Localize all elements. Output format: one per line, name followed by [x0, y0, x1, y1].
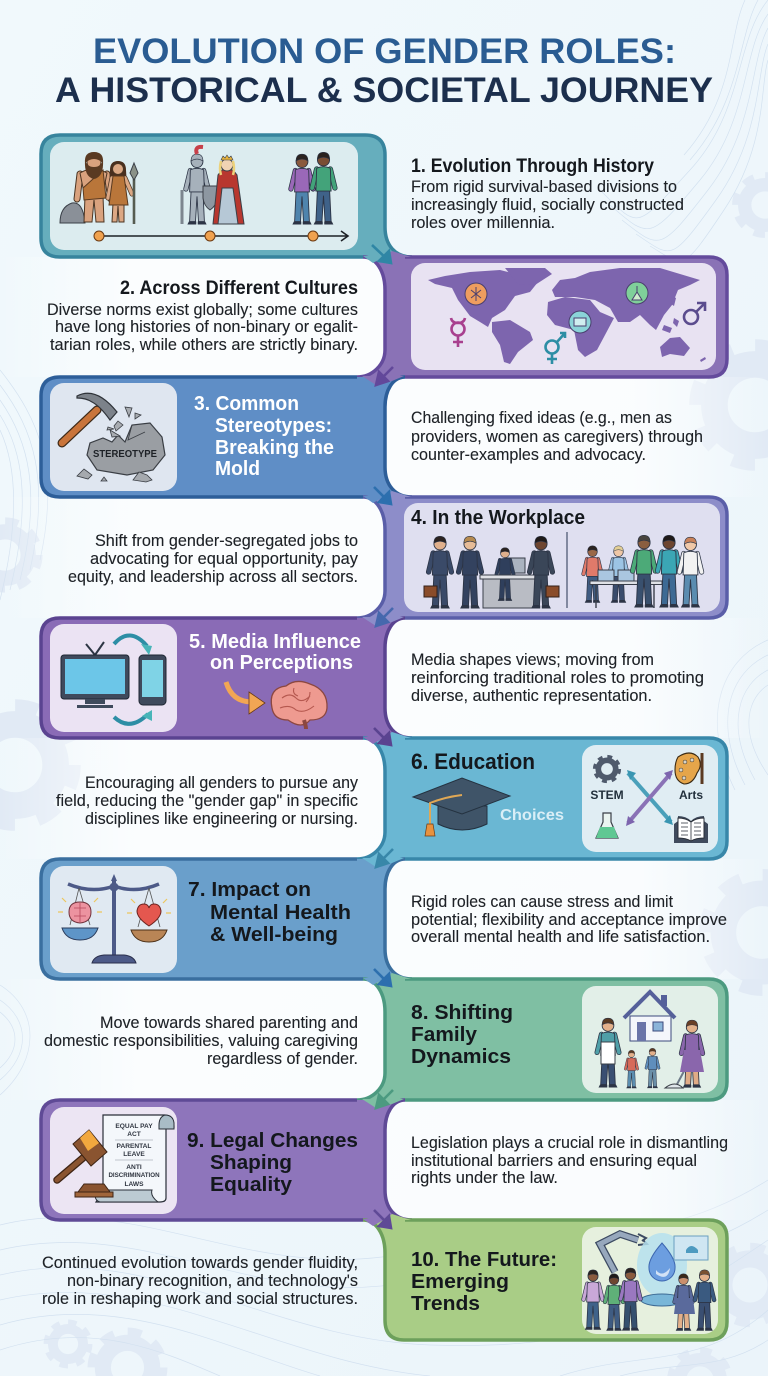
text block 5: Media shapes views; moving from — [411, 650, 654, 669]
text block 5 — [411, 650, 704, 705]
text block 7: potential; flexibility and acceptance improve — [411, 910, 727, 929]
text block 1: roles over millennia. — [411, 213, 555, 232]
text block 7 — [411, 892, 727, 946]
heading 10: Trends — [411, 1293, 480, 1315]
heading 7: & Well-being — [210, 924, 338, 946]
heading 3: Breaking the — [215, 437, 334, 459]
text block 6: field, reducing the "gender gap" in specific — [56, 791, 358, 810]
heading 4: 4. In the Workplace — [411, 507, 585, 529]
heading 3: Stereotypes: — [215, 415, 332, 437]
text block 3: counter-examples and advocacy. — [411, 445, 646, 464]
text block 6 — [56, 773, 358, 828]
heading 9: Shaping — [210, 1152, 292, 1174]
text block 10 — [42, 1253, 358, 1308]
icon: stem and arts choices: STEM — [590, 788, 624, 802]
text block 8: domestic responsibilities, valuing caregiving — [44, 1031, 358, 1050]
text block 9: rights under the law. — [411, 1168, 558, 1187]
icon: legal scroll: PARENTAL — [117, 1143, 151, 1150]
icon: legal scroll: LAWS — [124, 1181, 144, 1188]
heading 7 — [188, 879, 351, 946]
icon: legal scroll: ANTI — [126, 1164, 142, 1171]
title — [55, 32, 713, 110]
junction colour splits — [362, 251, 411, 1226]
icon: traditional office — [424, 536, 559, 608]
heading 10: 10. The Future: — [411, 1249, 557, 1271]
icon: diverse team — [584, 535, 702, 608]
text cards backdrop — [0, 257, 768, 1220]
text block 2 — [47, 278, 358, 354]
text block 8: Move towards shared parenting and — [100, 1013, 358, 1032]
label: choices: Choices — [500, 807, 564, 824]
text block 8 — [44, 1013, 358, 1068]
icon: prehistoric couple — [60, 152, 138, 224]
heading 8: 8. Shifting — [411, 1002, 513, 1024]
icon: stem and arts choices — [590, 753, 708, 843]
icon: legal scroll: ACT — [127, 1131, 141, 1138]
panel 6: education — [357, 738, 727, 859]
heading 7: 7. Impact on — [188, 879, 311, 901]
text block 5: diverse, authentic representation. — [411, 686, 652, 705]
timeline arrow — [94, 231, 348, 241]
icon: legal scroll: DISCRIMINATION — [108, 1172, 160, 1179]
icon: modern couple — [291, 152, 335, 225]
text block 6: disciplines like engineering or nursing. — [85, 809, 358, 828]
text block 4: equity, and leadership across all sectors. — [68, 567, 358, 586]
icon: robot arm, hologram and people — [584, 1233, 714, 1331]
heading 5 — [189, 631, 361, 674]
icons: gender symbols — [451, 303, 705, 364]
text block 4 — [68, 531, 358, 586]
heading 8: Family — [411, 1024, 478, 1046]
icon: legal scroll: EQUAL PAY — [115, 1123, 153, 1130]
icon: orange arrow — [226, 682, 252, 702]
heading 9 — [187, 1130, 358, 1196]
heading 3: Mold — [215, 458, 260, 480]
heading 5: 5. Media Influence — [189, 631, 361, 653]
text block 2: Diverse norms exist globally; some cultures — [47, 300, 358, 319]
icon: legal scroll — [57, 1115, 174, 1202]
text block 4: Shift from gender-segregated jobs to — [95, 531, 358, 550]
text block 10: non-binary recognition, and technology's — [67, 1271, 358, 1290]
heading 10: Emerging — [411, 1271, 509, 1293]
text block 2: have long histories of non-binary or egalit- — [55, 317, 358, 336]
panel 5: media — [41, 618, 412, 738]
icon: legal scroll: LEAVE — [123, 1151, 145, 1158]
world map — [428, 268, 706, 364]
text block 10: role in reshaping work and social structures. — [42, 1289, 358, 1308]
panel 10: future — [363, 1220, 727, 1340]
heading 9: Equality — [210, 1174, 293, 1196]
heading 3 — [194, 393, 334, 480]
title: EVOLUTION OF GENDER ROLES: — [93, 32, 676, 71]
icon: stem and arts choices: Arts — [679, 788, 703, 802]
text block 1: From rigid survival-based divisions to — [411, 177, 677, 196]
text block 5: reinforcing traditional roles to promoting — [411, 668, 704, 687]
text block 7: Rigid roles can cause stress and limit — [411, 892, 673, 911]
heading 10 — [411, 1249, 557, 1315]
text block 10: Continued evolution towards gender fluidity, — [42, 1253, 358, 1272]
panel 3: stereotypes — [41, 377, 412, 497]
text block 1: 1. Evolution Through History — [411, 156, 654, 177]
text block 3: Challenging fixed ideas (e.g., men as — [411, 408, 672, 427]
text block 6: Encouraging all genders to pursue any — [85, 773, 358, 792]
text block 7: overall mental health and life satisfaction. — [411, 927, 710, 946]
icon: arrowhead orange — [249, 692, 265, 714]
icon: hammer and rock: STEREOTYPE — [93, 448, 157, 460]
text block 4: advocating for equal opportunity, pay — [90, 549, 358, 568]
panel 9: legal — [41, 1100, 412, 1220]
panel 2: across cultures map — [357, 257, 727, 377]
text block 8: regardless of gender. — [207, 1049, 358, 1068]
heading 8 — [411, 1002, 513, 1068]
text block 1: increasingly fluid, socially constructed — [411, 195, 684, 214]
icon: graduation cap — [413, 778, 510, 836]
icon: brain — [271, 681, 327, 729]
icon: family and house — [597, 992, 704, 1088]
text block 3 — [411, 408, 703, 464]
icon: knight and queen — [182, 147, 244, 225]
panel 4: workplace — [357, 497, 727, 618]
heading 8: Dynamics — [411, 1046, 511, 1068]
text block 2: 2. Across Different Cultures — [120, 278, 358, 299]
icons: circles on map — [465, 282, 648, 333]
text block 3: providers, women as caregivers) through — [411, 427, 703, 446]
text block 9: Legislation plays a crucial role in dismantling — [411, 1133, 728, 1152]
text block 9 — [411, 1133, 728, 1187]
heading 7: Mental Health — [210, 902, 351, 924]
heading 5: on Perceptions — [210, 652, 353, 674]
icon: hammer and rock — [62, 393, 165, 482]
text block 1 — [411, 156, 684, 232]
panel 7: mental health — [41, 859, 412, 979]
text block 9: institutional barriers and ensuring equal — [411, 1151, 697, 1170]
icon: balance scale — [58, 874, 171, 963]
panel 1: evolution through history — [41, 135, 412, 257]
panel 8: family — [357, 979, 727, 1100]
heading 9: 9. Legal Changes — [187, 1130, 358, 1152]
flow arrows between panels — [372, 245, 393, 1228]
heading 6: 6. Education — [411, 749, 535, 774]
heading 3: 3. Common — [194, 393, 299, 415]
text block 2: tarian roles, while others are strictly binary. — [50, 335, 358, 354]
icon: tv and phone — [61, 635, 166, 724]
title: A HISTORICAL & SOCIETAL JOURNEY — [55, 71, 713, 110]
